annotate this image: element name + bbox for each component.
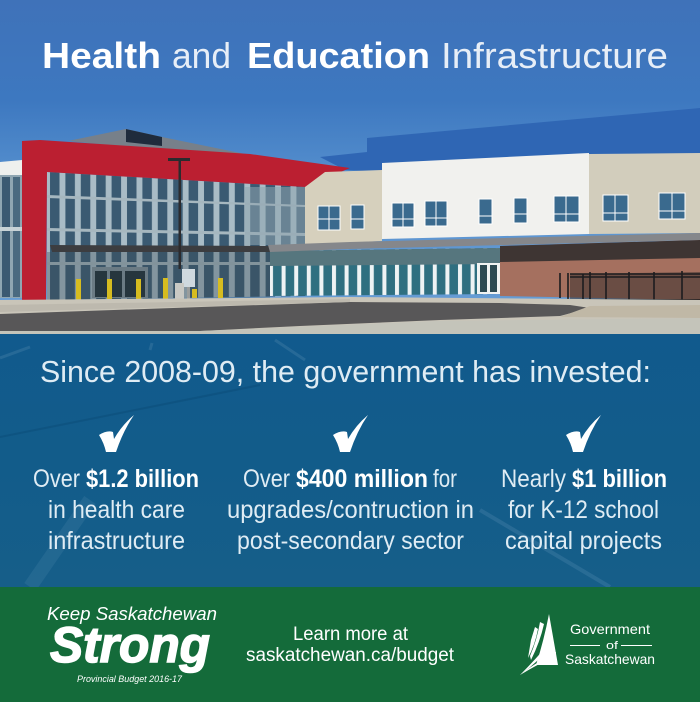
text: post-secondary investment: for bbox=[433, 465, 457, 493]
dark roof section bbox=[68, 129, 250, 155]
logo: Keep Saskatchewan Strong: Provincial Budget 2016-17 bbox=[77, 674, 183, 684]
lower glass storefront bbox=[270, 248, 500, 296]
main glass facade bbox=[47, 172, 305, 300]
text: learn more link: saskatchewan.ca/budget bbox=[246, 645, 455, 666]
icon: wheat mark bbox=[520, 614, 558, 675]
text: post-secondary investment: $400 million bbox=[296, 465, 428, 493]
light pole bbox=[178, 159, 181, 269]
beige wing bbox=[305, 170, 382, 245]
text: post-secondary investment: upgrades/contruction in bbox=[227, 496, 474, 524]
text: learn more link: Learn more at bbox=[293, 624, 409, 645]
white wing bbox=[382, 153, 589, 239]
logo: Government of Saskatchewan: Government bbox=[570, 621, 650, 637]
logo: Government of Saskatchewan: of bbox=[606, 640, 619, 652]
text: health investment: $1.2 billion bbox=[86, 465, 199, 493]
column: K-12 bbox=[501, 415, 667, 555]
logo: Keep Saskatchewan Strong: Keep Saskatchewan bbox=[47, 604, 217, 624]
panel: green footer bbox=[0, 587, 700, 702]
title bbox=[42, 35, 668, 76]
canopy bbox=[50, 245, 270, 252]
yellow bollards bbox=[76, 278, 223, 300]
blue upper block bbox=[320, 108, 700, 172]
title: and bbox=[172, 35, 231, 76]
text: post-secondary investment bbox=[227, 465, 474, 555]
text: learn more link bbox=[246, 624, 455, 666]
brick wall bbox=[500, 240, 700, 300]
logo: Government of Saskatchewan: Saskatchewan bbox=[565, 651, 655, 667]
column: post-secondary bbox=[227, 415, 474, 555]
logo: Government of Saskatchewan bbox=[520, 614, 655, 675]
left white wing bbox=[0, 160, 22, 178]
text: health investment: infrastructure bbox=[48, 527, 185, 555]
text: health investment: in health care bbox=[48, 496, 185, 524]
icon: check mark bbox=[566, 415, 601, 452]
text: post-secondary investment: Over bbox=[243, 465, 290, 493]
right beige wing bbox=[589, 153, 700, 234]
ground and road bbox=[0, 297, 700, 335]
text: K-12 investment: Nearly bbox=[501, 465, 566, 493]
icon: check mark bbox=[333, 415, 368, 452]
panel: blue investment panel bbox=[0, 334, 700, 587]
building photo illustration bbox=[0, 108, 700, 330]
red cladding bbox=[22, 140, 350, 301]
entrance doors bbox=[92, 267, 148, 298]
column: health care bbox=[33, 415, 199, 555]
text: K-12 investment: for K-12 school bbox=[508, 496, 659, 524]
text: health investment: Over bbox=[33, 465, 80, 493]
logo: Keep Saskatchewan Strong: Strong bbox=[50, 617, 210, 673]
text: K-12 investment: $1 billion bbox=[572, 465, 667, 493]
icon: check mark bbox=[99, 415, 134, 452]
logo: Keep Saskatchewan Strong bbox=[47, 604, 217, 684]
text: K-12 investment bbox=[501, 465, 667, 555]
text: post-secondary investment: post-secondary sector bbox=[237, 527, 464, 555]
fence bbox=[560, 271, 700, 305]
title: Infrastructure bbox=[441, 35, 668, 76]
text: K-12 investment: capital projects bbox=[505, 527, 662, 555]
heading: investment statement: Since 2008-09, the government has invested: bbox=[40, 354, 651, 389]
text: health investment bbox=[33, 465, 199, 555]
title: Health bbox=[42, 35, 161, 76]
title: Education bbox=[247, 35, 430, 76]
panel: photo background sky bbox=[0, 0, 700, 335]
upper windows bbox=[318, 193, 685, 230]
